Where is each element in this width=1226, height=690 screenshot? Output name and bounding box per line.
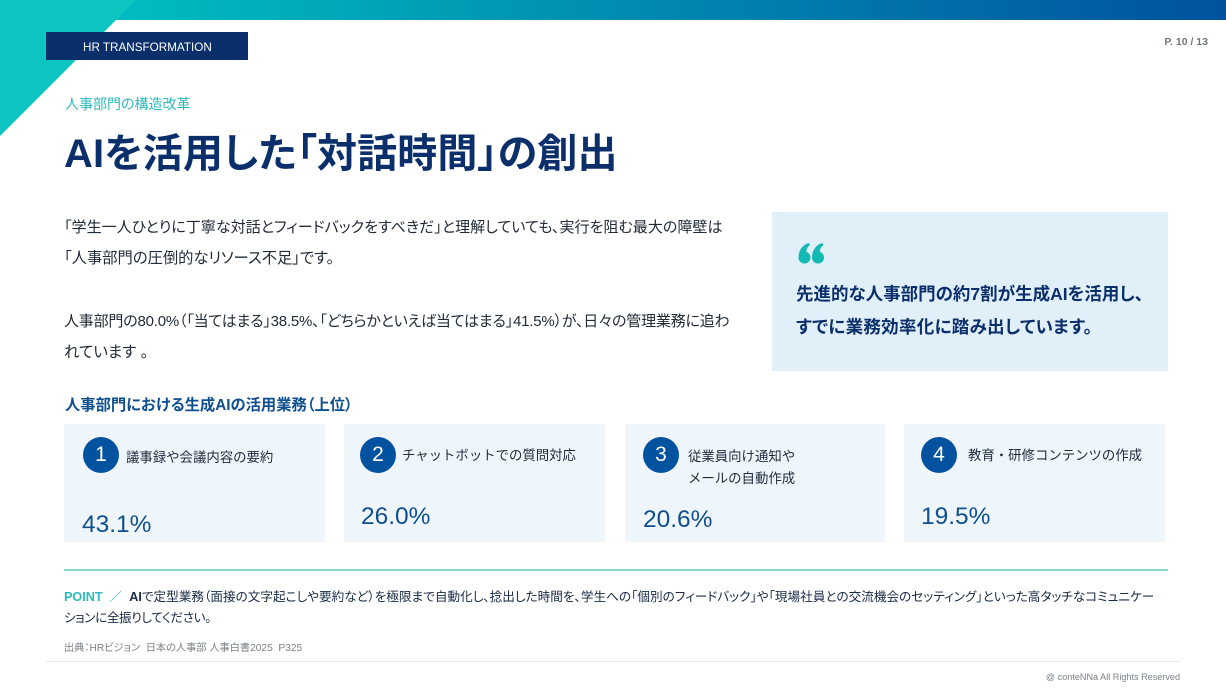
point text: ションに全振りしてください。 xyxy=(64,611,211,625)
point text xyxy=(64,590,1154,625)
card 1: 1 xyxy=(95,443,107,466)
card 3: 3 xyxy=(655,443,667,466)
card 3 xyxy=(625,424,885,542)
quote panel xyxy=(772,212,1168,371)
footer line xyxy=(46,661,1180,662)
card 1 xyxy=(64,424,325,542)
card 2: 2 xyxy=(372,443,384,466)
point text: POINT ／ AIで定型業務（面接の文字起こしや要約など）を極限まで自動化し、捻出した時間を、学生への「個別のフィードバック」や「現場社員との交流機会のセッティング」といった高タッチなコミュニケー xyxy=(64,590,1154,604)
quote text xyxy=(796,284,1143,337)
divider xyxy=(64,569,1168,571)
body text: れています 。 xyxy=(64,344,148,361)
section tag: HR TRANSFORMATION xyxy=(83,41,212,54)
body text: 「人事部門の圧倒的なリソース不足」です。 xyxy=(64,250,334,267)
body text: 「学生一人ひとりに丁寧な対話とフィードバックをすべきだ」と理解していても、実行を阻む最大の障壁は xyxy=(64,219,723,236)
icon: quote mark xyxy=(798,243,824,264)
card 4 xyxy=(904,424,1165,542)
card 3: メールの自動作成 xyxy=(688,471,795,486)
card 4: 19.5% xyxy=(921,503,990,530)
card 1: 議事録や会議内容の要約 xyxy=(126,450,273,465)
quote text: すでに業務効率化に踏み出しています。 xyxy=(796,317,1093,337)
subtitle: 人事部門の構造改革 xyxy=(65,96,190,112)
body text xyxy=(64,219,729,361)
section tag xyxy=(46,32,248,60)
card 2: 26.0% xyxy=(361,503,430,530)
copyright: @ conteNNa All Rights Reserved xyxy=(1046,672,1180,682)
quote text: 先進的な人事部門の約7割が生成AIを活用し、 xyxy=(796,284,1143,304)
top gradient bar xyxy=(0,0,1226,20)
page number: P. 10 / 13 xyxy=(1164,36,1208,48)
body text: 人事部門の80.0%（「当てはまる」38.5%、「どちらかといえば当てはまる」41.5%）が、日々の管理業務に追わ xyxy=(64,313,729,330)
card 3: 20.6% xyxy=(643,506,712,533)
card 2 xyxy=(344,424,605,542)
card 4: 4 xyxy=(933,443,945,466)
corner triangle xyxy=(0,0,136,136)
card 3: 従業員向け通知や xyxy=(688,449,795,464)
card 2: チャットボットでの質問対応 xyxy=(402,448,576,463)
title: AIを活用した「対話時間」の創出 xyxy=(64,132,618,176)
chart heading: 人事部門における生成AIの活用業務（上位） xyxy=(65,397,353,414)
source: 出典：HRビジョン 日本の人事部 人事白書2025 P325 xyxy=(64,643,302,654)
card 4: 教育・研修コンテンツの作成 xyxy=(968,448,1142,463)
card 1: 43.1% xyxy=(82,511,151,538)
